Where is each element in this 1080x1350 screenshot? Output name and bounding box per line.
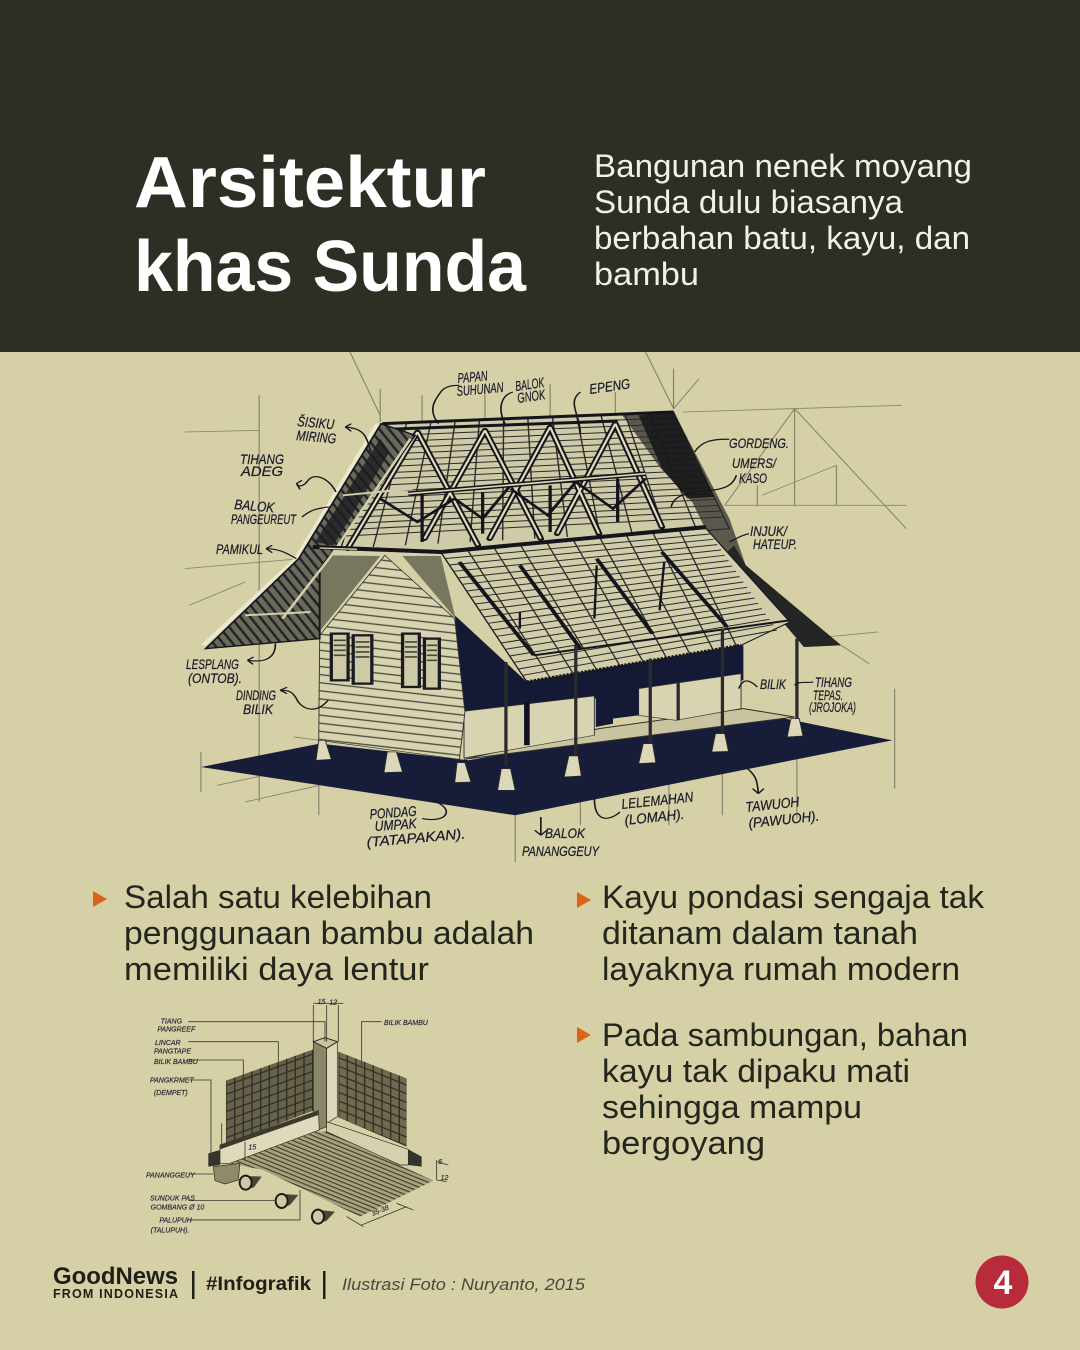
small labels: LINCAR xyxy=(155,1040,181,1047)
bullet: joints: bergoyang xyxy=(602,1125,765,1161)
gable shaded triangles xyxy=(320,555,380,630)
small labels: PANGKRMET xyxy=(150,1078,194,1085)
roof rafters xyxy=(459,552,790,655)
bullet: bamboo flexibility: memiliki daya lentur xyxy=(124,951,429,987)
handwritten labels: SUHUNAN xyxy=(456,379,505,399)
gable wall xyxy=(319,555,465,759)
handwritten labels: BALOK xyxy=(234,496,276,516)
handwritten labels: (TATAPAKAN). xyxy=(366,825,466,850)
small labels: BILIK BAMBU xyxy=(384,1020,429,1027)
end posts xyxy=(208,1150,220,1167)
handwritten labels: PANGEUREUT xyxy=(231,511,297,527)
round logs xyxy=(247,1176,335,1223)
handwritten labels: TEPAS. xyxy=(813,687,843,703)
icon: orange triangle xyxy=(577,1027,591,1043)
handwritten labels: KASO xyxy=(739,470,767,486)
page number badge xyxy=(976,1256,1028,1308)
floor deck xyxy=(464,709,795,759)
small labels: 15 xyxy=(318,999,326,1006)
bullet: bamboo flexibility xyxy=(93,879,534,987)
right hip shading xyxy=(622,411,841,647)
left beam xyxy=(220,1111,319,1163)
small labels xyxy=(146,999,449,1235)
handwritten labels: PAMIKUL xyxy=(216,541,263,557)
subtitle: bambu xyxy=(594,256,699,292)
small labels: PANGREEF xyxy=(157,1027,196,1034)
bullet: joints: kayu tak dipaku mati xyxy=(602,1053,910,1089)
title: Arsitektur xyxy=(134,143,486,223)
page number badge: 4 xyxy=(994,1264,1013,1302)
handwritten labels: ADEG xyxy=(240,463,283,479)
ridge beam xyxy=(383,412,674,429)
handwritten labels: TAWUOH xyxy=(745,793,801,815)
small labels: (DEMPET) xyxy=(154,1090,188,1097)
footer xyxy=(53,1263,586,1301)
hashtag: #Infografik xyxy=(206,1274,311,1295)
bullet: bamboo flexibility: penggunaan bambu adalah xyxy=(124,915,534,951)
handwritten labels: GNOK xyxy=(516,386,547,406)
small labels: 12 xyxy=(329,1000,337,1007)
bullet: joints: Pada sambungan, bahan xyxy=(602,1017,968,1053)
handwritten labels xyxy=(186,367,856,859)
subtitle: Sunda dulu biasanya xyxy=(594,184,903,220)
tie beam xyxy=(408,474,646,494)
header band xyxy=(0,0,1080,352)
subtitle: Bangunan nenek moyang xyxy=(594,148,972,184)
bullet: foundation timber: ditanam dalam tanah xyxy=(602,915,918,951)
icon: orange triangle xyxy=(93,891,107,907)
small labels: PANGTAPE xyxy=(154,1048,191,1055)
subtitle: berbahan batu, kayu, dan xyxy=(594,220,970,256)
handwritten labels: UMERS/ xyxy=(732,455,778,471)
handwritten labels: MIRING xyxy=(296,427,337,446)
small labels: BILIK BAMBU xyxy=(154,1059,199,1066)
corner post xyxy=(313,1042,327,1130)
handwritten labels: BALOK xyxy=(514,374,546,394)
small labels: PANANGGEUY xyxy=(146,1172,196,1179)
bullet: foundation timber: Kayu pondasi sengaja tak xyxy=(602,879,985,915)
front roof xyxy=(441,529,790,682)
handwritten labels: BALOK xyxy=(545,825,586,841)
handwritten labels: TIHANG xyxy=(815,674,852,690)
porch shadowed wall xyxy=(455,615,743,712)
handwritten labels: INJUK/ xyxy=(750,523,789,539)
logo: GoodNews: GoodNews xyxy=(53,1263,178,1290)
leader lines xyxy=(188,1003,448,1227)
bullet: foundation timber: layaknya rumah modern xyxy=(602,951,960,987)
stone foundations xyxy=(316,719,803,790)
handwritten labels: PAPAN xyxy=(457,367,489,386)
illustration: wall and floor detail sketch xyxy=(146,999,449,1235)
handwritten labels: TIHANG xyxy=(240,451,284,467)
bullet: foundation timber xyxy=(577,879,985,987)
handwritten labels: PONDAG xyxy=(369,803,417,822)
bullet: joints: sehingga mampu xyxy=(602,1089,862,1125)
handwritten labels: DINDING xyxy=(236,687,276,703)
handwritten labels: LESPLANG xyxy=(186,656,239,672)
eave beam xyxy=(313,527,706,552)
small labels: SUNDUK PAS xyxy=(150,1196,195,1203)
small labels: GOMBANG Ø 10 xyxy=(151,1204,204,1211)
handwritten labels: BILIK xyxy=(760,676,786,692)
handwritten labels: HATEUP. xyxy=(753,536,797,552)
small labels: 6 xyxy=(438,1159,442,1166)
right beam xyxy=(327,1122,408,1165)
handwritten labels: (ONTOB). xyxy=(188,670,242,686)
porch posts xyxy=(506,629,797,765)
subtitle xyxy=(594,148,972,292)
small labels: 15 xyxy=(248,1144,256,1151)
left hip roof xyxy=(203,424,378,645)
right woven wall xyxy=(338,1052,407,1147)
logo: GoodNews: FROM INDONESIA xyxy=(53,1287,178,1301)
handwritten labels: UMPAK xyxy=(374,815,418,834)
title xyxy=(134,143,527,307)
photo credit: Ilustrasi Foto : Nuryanto, 2015 xyxy=(342,1275,586,1294)
handwritten labels: (JROJOKA) xyxy=(809,699,856,715)
bullet: bamboo flexibility: Salah satu kelebihan xyxy=(124,879,432,915)
bullet: joints xyxy=(577,1017,968,1161)
illustration: traditional Sundanese house sketch xyxy=(185,352,906,862)
left woven wall xyxy=(226,1049,313,1144)
icon: orange triangle xyxy=(577,892,591,908)
handwritten labels: (LOMAH). xyxy=(624,806,685,828)
handwritten labels: BILIK xyxy=(243,701,274,717)
small labels: PALUPUH xyxy=(159,1218,193,1225)
thatch fringe xyxy=(527,645,741,682)
handwritten labels: EPENG xyxy=(588,375,631,397)
door xyxy=(596,689,639,727)
handwritten labels: (PAWUOH). xyxy=(748,808,820,831)
handwritten labels: ŠISIKU xyxy=(297,413,336,432)
floor planks xyxy=(230,1132,433,1217)
small labels: 12 xyxy=(441,1175,449,1182)
small labels: 35-38 xyxy=(371,1205,390,1218)
handwritten labels: PANANGGEUY xyxy=(522,843,600,859)
handwritten labels: LELEMAHAN xyxy=(621,788,695,812)
pencil construction lines xyxy=(185,352,906,862)
small labels: TIANG xyxy=(161,1018,183,1025)
callout arrows xyxy=(248,385,813,835)
title: khas Sunda xyxy=(134,227,527,307)
back roof xyxy=(341,412,729,552)
ground shadow xyxy=(201,710,892,815)
small labels: (TALUPUH). xyxy=(151,1228,189,1235)
windows xyxy=(331,634,439,689)
handwritten labels: GORDENG. xyxy=(729,435,789,451)
trusses xyxy=(348,424,662,549)
porch lower wall xyxy=(464,696,594,758)
